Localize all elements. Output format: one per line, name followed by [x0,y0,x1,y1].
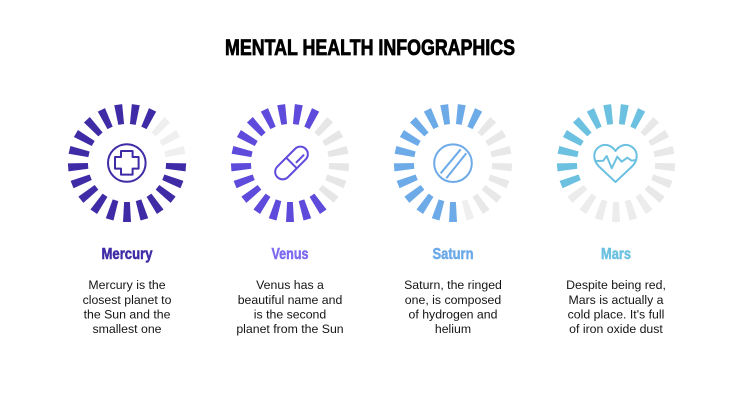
progress ring: Mars [557,104,675,222]
text: Mercury description: the Sun and the [84,308,171,322]
text: Saturn description: one, is composed [405,293,501,307]
panel: Venus [231,104,349,336]
text: Mercury description [83,278,172,336]
text: Mars description: Mars is actually a [568,293,664,307]
text: Venus description: beautiful name and [238,293,342,307]
progress ring: Mercury [68,104,186,222]
text: Venus description: is the second [254,308,326,322]
icon: medical cross [108,144,146,182]
text: Mars description: of iron oxide dust [569,322,663,336]
progress ring: Venus [231,104,349,222]
text: Mars description [566,278,666,336]
text: Venus description: Venus has a [256,278,324,292]
panel: Saturn [394,104,512,336]
text: Mercury description: closest planet to [83,293,172,307]
text: Saturn description: of hydrogen and [409,308,498,322]
text: Saturn description [404,278,502,336]
text: Mercury description: Mercury is the [88,278,166,292]
text: Venus description: planet from the Sun [236,322,344,336]
progress ring: Saturn [394,104,512,222]
icon: pill capsule [272,144,311,182]
icon: ringed tablet [434,144,472,182]
text: Mars description: cold place. It's full [568,308,664,322]
heading: Mercury: Mercury [102,246,153,263]
heading: Saturn: Saturn [432,246,474,263]
text: Venus description [236,278,344,336]
panel: Mercury [68,104,186,336]
icon: heart with pulse [594,145,637,182]
text: Saturn description: helium [435,322,471,336]
text: Mars description: Despite being red, [566,278,666,292]
heading: Venus: Venus [272,246,309,263]
text: Saturn description: Saturn, the ringed [404,278,502,292]
panel: Mars [557,104,675,336]
heading: Mars: Mars [601,246,631,263]
title: MENTAL HEALTH INFOGRAPHICS [225,35,515,60]
text: Mercury description: smallest one [92,322,162,336]
